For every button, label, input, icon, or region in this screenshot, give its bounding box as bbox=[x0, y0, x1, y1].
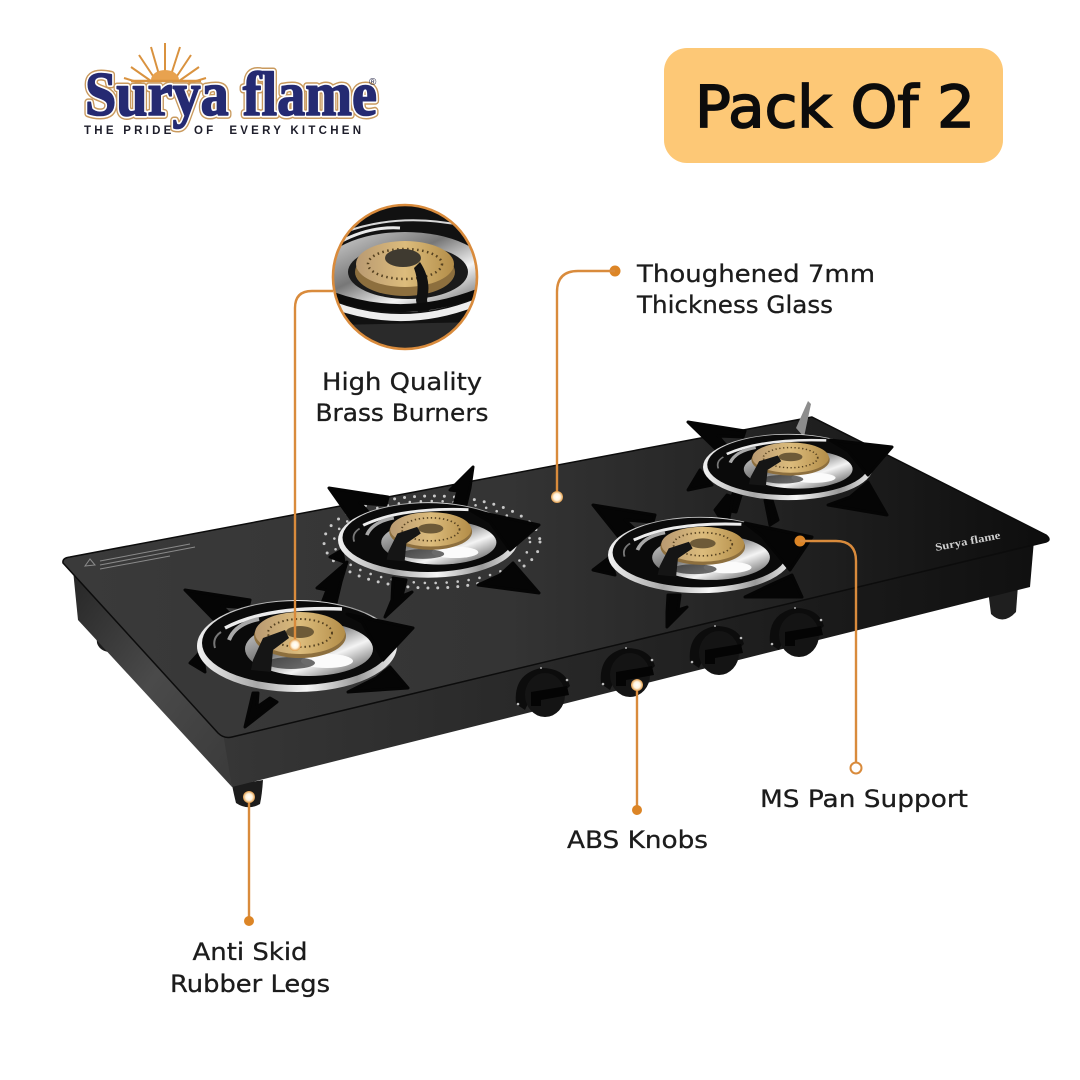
logo: Surya flame bbox=[84, 43, 377, 137]
leader: ABS knobs bbox=[631, 679, 643, 815]
badge: Pack Of 2: Pack Of 2 bbox=[695, 73, 975, 141]
brand print on glass: Surya flame bbox=[934, 530, 1001, 554]
leader: brass burners bbox=[289, 291, 333, 651]
stove glass top bbox=[63, 417, 1049, 738]
inset: brass burner close-up bbox=[332, 204, 478, 350]
logo: Surya flame: Surya flame bbox=[85, 61, 377, 129]
label: MS Pan Support: MS Pan Support bbox=[760, 785, 968, 813]
label: Anti Skid Rubber Legs: Rubber Legs bbox=[170, 970, 330, 998]
label: ABS Knobs: ABS Knobs bbox=[567, 826, 708, 854]
burner: front right bbox=[593, 495, 812, 627]
burner: front left bbox=[185, 562, 413, 727]
logo: Surya flame: Surya flame bbox=[85, 61, 377, 129]
logo registered mark: ® bbox=[369, 77, 377, 88]
front right pan supports bbox=[593, 495, 802, 627]
stove rubber legs bbox=[96, 585, 1018, 807]
front left pan supports bbox=[185, 562, 408, 727]
leader: rubber legs bbox=[243, 791, 255, 926]
badge: Pack Of 2 bbox=[664, 48, 1003, 163]
stove side panel bbox=[73, 570, 232, 787]
leader: MS pan support bbox=[794, 536, 862, 774]
back left pan supports bbox=[329, 467, 539, 617]
stove front panel bbox=[223, 540, 1034, 787]
burner: back right bbox=[688, 401, 892, 525]
label: High Quality Brass Burners: High Quality bbox=[322, 368, 482, 396]
label: Thoughened 7mm Thickness Glass: Thoughened 7mm bbox=[636, 260, 875, 288]
label: High Quality Brass Burners: Brass Burners bbox=[316, 399, 488, 427]
label: High Quality Brass Burners bbox=[316, 368, 488, 427]
knobs bbox=[516, 607, 824, 717]
label: Anti Skid Rubber Legs: Anti Skid bbox=[192, 938, 308, 966]
logo tagline: THE PRIDE OF EVERY KITCHEN bbox=[84, 125, 361, 137]
label: Thoughened 7mm Thickness Glass: Thickness Glass bbox=[636, 291, 833, 319]
label: Anti Skid Rubber Legs bbox=[170, 938, 330, 998]
label: Thoughened 7mm Thickness Glass bbox=[636, 260, 875, 319]
burner: back left bbox=[329, 467, 539, 617]
glass printed dots around burner bbox=[324, 496, 540, 588]
back right pan supports bbox=[688, 401, 887, 525]
glass warning print bbox=[85, 544, 195, 569]
leader: toughened glass bbox=[551, 266, 620, 503]
logo wordmark: Surya flame bbox=[85, 61, 377, 129]
logo sun rays bbox=[124, 43, 206, 85]
product: gas stove bbox=[63, 401, 1049, 807]
